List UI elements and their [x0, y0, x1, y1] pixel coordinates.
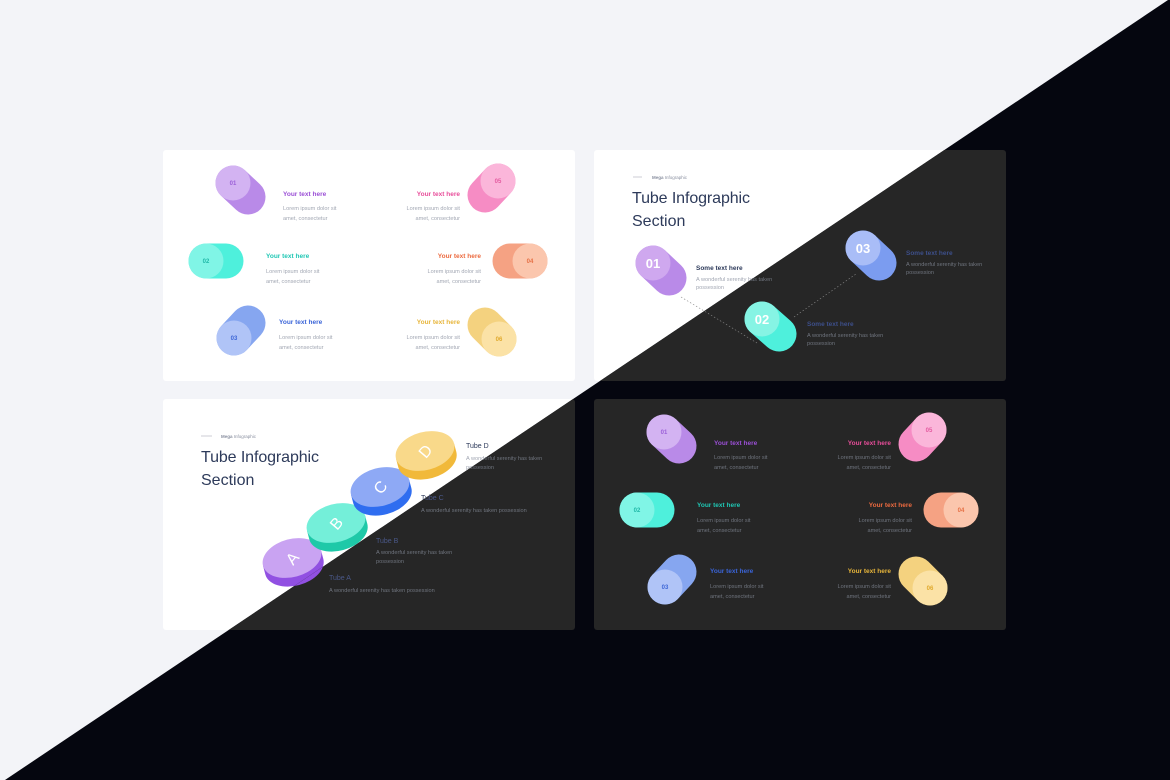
panel: discs dark [228, 399, 575, 630]
panel: discs light: Mega Infographic [221, 434, 257, 439]
panel: tube infographic steps light: Tube Infographic [632, 190, 750, 207]
panel: tube infographic steps light: Section [632, 213, 685, 230]
panel: discs light [163, 399, 575, 630]
panel: tube infographic steps light [594, 150, 1006, 381]
panel: tubes six dark [594, 399, 1006, 630]
panel: tubes six light [163, 150, 575, 381]
panel: discs light: Tube Infographic [201, 449, 319, 466]
panel: discs light: Section [201, 472, 254, 489]
panel: steps dark [594, 150, 1006, 381]
panel: tube infographic steps light: Mega Infographic [652, 175, 688, 180]
